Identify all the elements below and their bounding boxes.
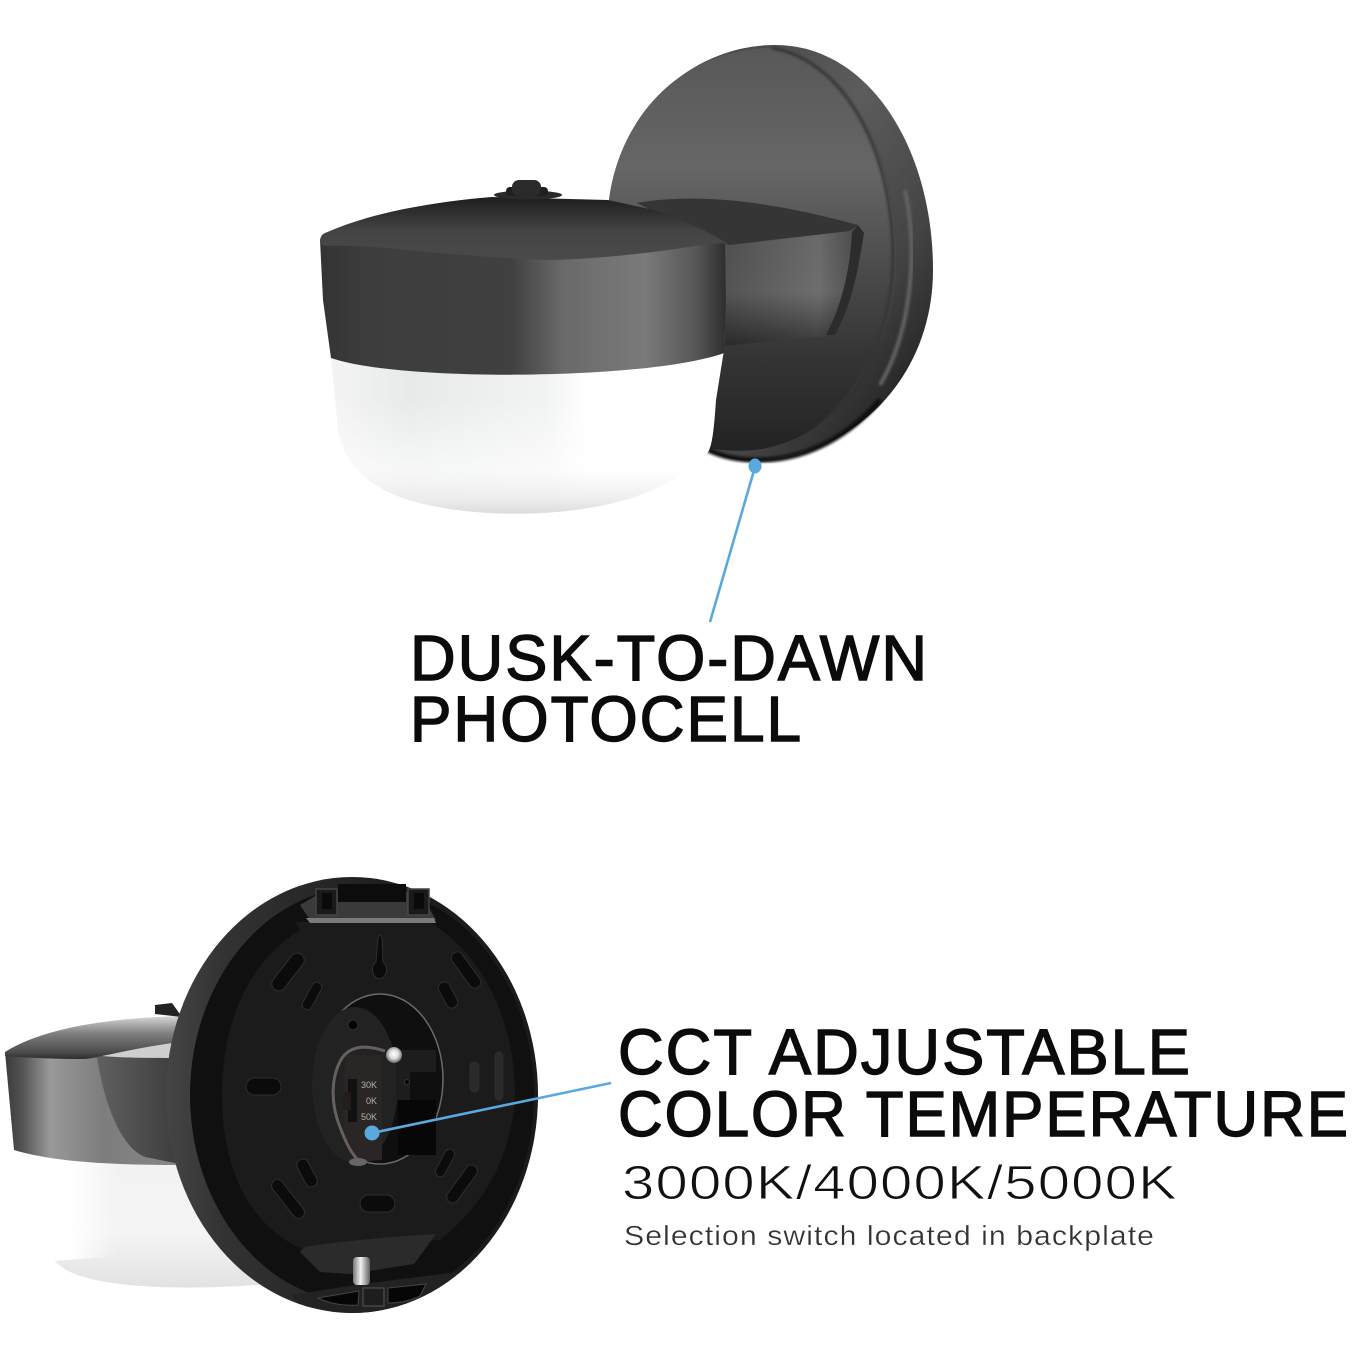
heading: dusk-to-dawn photocell: PHOTOCELL <box>410 683 803 755</box>
product photo: wall light rear view <box>5 877 538 1313</box>
backplate <box>608 45 933 460</box>
callout: CCT leader line <box>364 1083 611 1140</box>
lamp body behind the backplate <box>5 1003 270 1288</box>
dark housing band <box>320 240 726 375</box>
top retaining clip <box>300 884 436 923</box>
wiring opening <box>312 994 443 1164</box>
backplate raised face <box>222 922 515 1248</box>
mounting arm <box>637 199 864 346</box>
heading: CCT adjustable color temperature <box>618 1016 1350 1150</box>
backplate outer rim <box>166 877 538 1313</box>
text: switch location note: Selection switch located in backplate <box>624 1220 1155 1251</box>
housing dome cap <box>320 197 727 260</box>
product photo: wall light front view <box>320 45 933 514</box>
backplate inner recess <box>190 887 534 1303</box>
frosted white globe <box>330 350 724 514</box>
heading: dusk-to-dawn photocell <box>410 622 929 755</box>
switch cover wire <box>333 1047 402 1166</box>
bottom retaining clip and screw <box>292 1234 458 1313</box>
text: color temperature options: 3000K/4000K/5000K <box>622 1157 1178 1210</box>
heading: dusk-to-dawn photocell: DUSK-TO-DAWN <box>410 622 929 694</box>
CCT selection switch <box>343 1079 377 1122</box>
heading: CCT adjustable color temperature: CCT ADJUSTABLE <box>618 1016 1192 1088</box>
callout: dusk-to-dawn leader line <box>710 458 762 622</box>
CCT selection switch: 50K <box>361 1112 377 1122</box>
CCT selection switch: 0K <box>366 1096 377 1106</box>
mounting slots <box>246 935 503 1221</box>
CCT selection switch: 30K <box>361 1080 377 1090</box>
photocell sensor knob <box>494 180 562 200</box>
